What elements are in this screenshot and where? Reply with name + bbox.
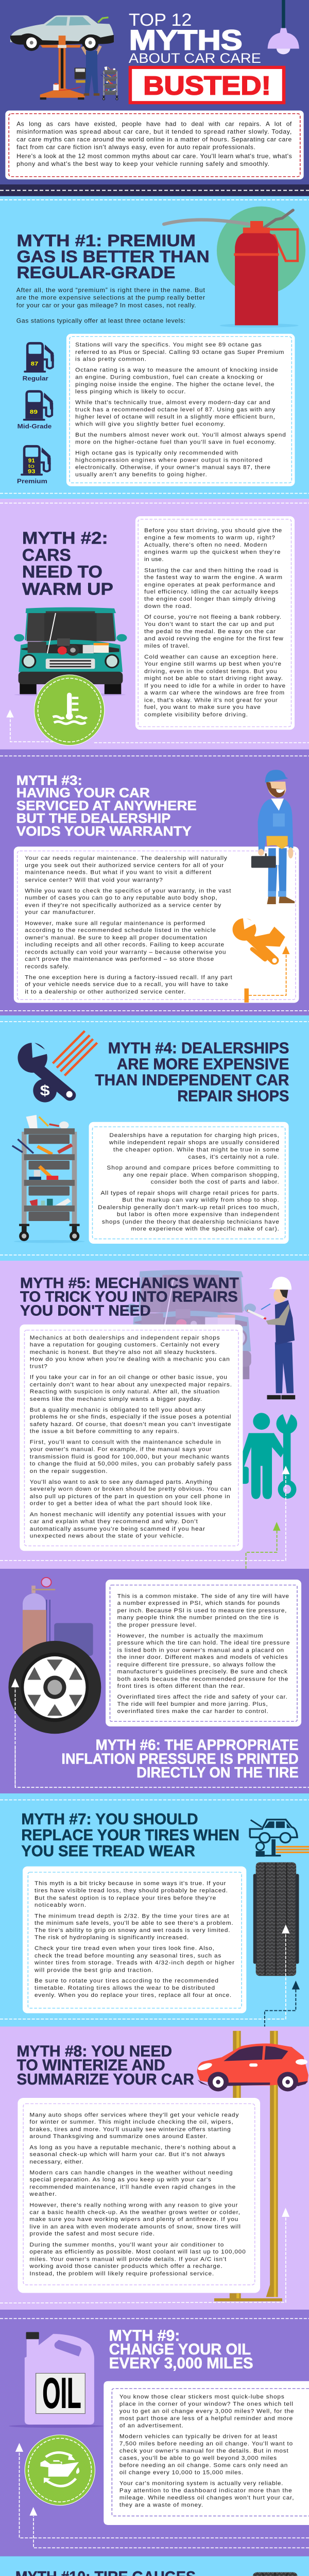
card: tread wear: evenly. When you do replace your tires, replace all four at once. <box>35 1992 231 1998</box>
card: oil change interval: You know those clear stickers most quick-lube shops <box>119 2394 284 2400</box>
card: seasonal check-ups: Instead, the problem will likely require professional service. <box>29 2271 214 2277</box>
card: seasonal check-ups: seasonal check-up which will harm your car. But it's not always <box>29 2151 225 2158</box>
heading: myth 3: MYTH #3: <box>16 773 82 788</box>
heading: myth 8: MYTH #8: YOU NEED <box>17 2042 172 2060</box>
card: tread wear <box>23 1867 246 2013</box>
card: oil change interval: oil change every 10,000 to 15,000 miles. <box>119 2470 243 2476</box>
card: tread wear: timetable. Rotating tires allows the wear to be distributed <box>35 1985 215 1991</box>
myth 3 text continued: it to a dealership or other authorized service center. <box>25 989 185 995</box>
myth 3 text continued <box>25 877 233 995</box>
card: octane explanation: highcompression engines where power output is monitored <box>75 457 262 463</box>
arrow: white dashed <box>0 1466 289 1561</box>
title: TOP 12 <box>129 11 192 30</box>
heading: myth 2: WARM UP <box>22 580 113 599</box>
icon: premium pump: 91 <box>28 458 35 464</box>
myth 2 text continued: down the road. <box>144 603 192 609</box>
card: seasonal check-ups: around Thanksgiving and summarize ones around Easter. <box>29 2133 208 2140</box>
card: octane explanation: an engine. During combustion, fuel can create a knocking or <box>75 375 263 380</box>
myth 2 text continued: You don't want to start the car up and put <box>144 621 274 628</box>
card: trustworthy mechanics <box>20 1325 243 1551</box>
myth 5 text continued: to change the fluid at 50,000 miles, you can probably safely pass <box>30 1461 232 1467</box>
myth 3 text continued: even if they're not specifically authorized as a service center by <box>25 903 221 908</box>
heading: myth 4 <box>95 1039 289 1105</box>
icon: car on lift <box>250 1820 309 1857</box>
card: trustworthy mechanics: If you take your car in for an oil change or other basic issue, you <box>30 1375 227 1381</box>
card: dealership prices: while independent repair shops are usually considered <box>109 1140 279 1146</box>
card: trustworthy mechanics: certainly don't want to hear about any unexpected major repairs. <box>30 1382 232 1388</box>
illustration: tool cart <box>100 66 118 100</box>
panel: myth 7 <box>0 1793 309 2027</box>
card: oil change interval: you to get an oil change every 3,000 miles? Well, for the <box>119 2409 294 2415</box>
card: warranty: maintenance needs. But what if you want to visit a different <box>25 870 212 876</box>
card: warm up: engines warm up the quickest when they're <box>144 549 281 555</box>
card: octane explanation: more on the higher-octane fuel than you'll save in fuel economy. <box>75 439 276 446</box>
myth 2 text continued <box>144 582 285 718</box>
card: warm up <box>135 516 295 730</box>
heading: myth 9: EVERY 3,000 MILES <box>109 2354 253 2372</box>
panel: myth 4 <box>0 1015 309 1261</box>
intro text: misinformation was spread about car care, but it tended to spread rather slowly. Today, <box>16 128 291 135</box>
road divider <box>0 184 309 196</box>
card: tire pressure: pressure which the tire can hold. The ideal tire pressure <box>117 1640 289 1646</box>
panel: myth 6 <box>0 1569 309 1793</box>
myth 2 text continued: fuel efficiency. Idling the car actually keeps <box>144 589 279 595</box>
panel: myth 10 <box>0 2556 309 2576</box>
card: trustworthy mechanics: the issue a bit before committing to any repairs. <box>30 1429 179 1435</box>
card: tire pressure: is listed both in your owner's manual and a placard on <box>117 1648 284 1653</box>
card: seasonal check-ups: recommended maintenance, it'll handle even rapid changes in the <box>29 2184 235 2190</box>
icon: premium pump <box>17 445 51 485</box>
panel: myth 1 <box>0 196 309 499</box>
card: seasonal check-ups: special preparation. As long as you keep up with your car's <box>29 2177 211 2183</box>
card: octane explanation: usually aren't any benefits to going higher. <box>75 472 207 478</box>
panel: header <box>0 0 309 196</box>
card: tire pressure: manufacturer's guidelines precisely. Be sure and check <box>117 1669 287 1675</box>
heading: myth 7: MYTH #7: YOU SHOULD <box>21 1810 198 1828</box>
heading: myth 8: TO WINTERIZE AND <box>17 2056 165 2074</box>
illustration: faded truck behind heading <box>126 1270 256 1379</box>
card: oil change interval: they are a waste of money. <box>119 2502 203 2509</box>
heading: myth 6 <box>61 1737 299 1781</box>
heading: myth 2: MYTH #2: <box>22 529 108 548</box>
card: octane explanation <box>66 334 295 486</box>
heading: myth 3: SERVICED AT ANYWHERE <box>16 798 197 813</box>
card: seasonal check-ups: for winter or summer. This might include checking the oil, wipers, <box>29 2119 233 2125</box>
icon: dark wrench with dollar: $ <box>40 1082 50 1099</box>
card: dealership prices: consider both the cost of parts and labor. <box>151 1179 279 1185</box>
icon: oil change badge <box>25 2435 95 2505</box>
icon: regular pump: Regular <box>23 375 48 382</box>
card: tread wear: noticeably worn. <box>35 1902 86 1908</box>
heading: myth 4: THAN INDEPENDENT CAR <box>95 1071 289 1089</box>
heading: myth 4: ARE MORE EXPENSIVE <box>117 1055 289 1073</box>
card: tire pressure: both axels because the recommended pressure for the <box>117 1676 288 1682</box>
intro text: phony and what's the best way to keep your vehicle running safely and smoothly. <box>16 160 269 167</box>
card: oil change interval: before needing an oil change. Some cars only need an <box>119 2463 287 2469</box>
icon: premium pump: 93 <box>28 469 35 475</box>
myth 3 text continued: including receipts and all other records. Failing to keep accurate <box>25 942 224 948</box>
heading: myth 4: MYTH #4: DEALERSHIPS <box>108 1039 289 1057</box>
heading: myth 2: NEED TO <box>22 563 102 582</box>
myth 5 text continued: on the repair suggestion. <box>30 1468 108 1475</box>
myth 2 text continued: fuel, you want to make sure you have <box>144 704 261 710</box>
card: octane explanation: electronically. Otherwise, if your owner's manual says 87, there <box>75 465 270 471</box>
myth 2 text continued: driving, even in the coldest temps. But you <box>144 669 277 674</box>
card: seasonal check-ups: necessary, either. <box>29 2159 83 2165</box>
badge: busted <box>130 67 284 103</box>
panel: myth 3 <box>0 750 309 1015</box>
card: warranty: urge you seek out their authorized service centers for all of your <box>25 862 224 869</box>
heading: myth 7: REPLACE YOUR TIRES WHEN <box>21 1826 239 1844</box>
heading: myth 1 <box>17 231 210 282</box>
panel: myth 2 <box>0 499 309 750</box>
myth 3 text continued: The one exception here is during a factory-issued recall. If any part <box>25 975 233 980</box>
myth 2 text continued: miles of travel. <box>144 643 190 649</box>
myth 3 text continued: of your vehicle needs service due to a recall, you will have to take <box>25 981 228 988</box>
heading: myth 9 <box>109 2327 253 2372</box>
card: tread wear: The minimum tread depth is 2/32. By the time your tires are at <box>35 1913 229 1919</box>
card: warm up: Actually, there's often no need. Modern <box>144 542 267 548</box>
card: oil change interval: most part those are less of a helpful reminder and more <box>119 2416 293 2421</box>
card: octane explanation: High octane gas is typically only recommended with <box>75 450 238 456</box>
card: warm up: in use. <box>144 556 164 563</box>
card: oil change interval: Your car's monitoring system is actually very reliable. <box>119 2481 283 2486</box>
myth 3 text continued: service center? Will that void your warranty? <box>25 877 163 883</box>
illustration: teal truck with open hood <box>14 607 127 696</box>
intro text: As long as cars have existed, people have had to deal with car repairs. A lot of <box>16 121 292 128</box>
title <box>129 11 261 66</box>
card: dealership prices: Shop around and compare prices before committing to <box>107 1165 279 1171</box>
illustration: red car on lift <box>197 2031 308 2301</box>
card: trustworthy mechanics: mechanic is honest. But they're also not all sleazy hucksters. <box>30 1349 217 1355</box>
card: octane explanation: pinging noise inside the engine. The higher the octane level, the <box>75 382 274 388</box>
card: seasonal check-ups: working avoid those canister products which offer a recharge. <box>29 2263 222 2269</box>
illustration: tire tread <box>253 1862 299 1976</box>
intro text: fact from car care fiction isn't always easy, even for auto repair professionals. <box>16 144 255 150</box>
icon: mid-grade pump: Mid-Grade <box>18 423 52 430</box>
heading: myth 2 <box>22 529 113 599</box>
title: ABOUT CAR CARE <box>129 50 261 66</box>
card: oil change interval: 7,500 miles before needing an oil change. You'll want to <box>119 2441 293 2447</box>
card: oil change interval: mileage. While needless oil changes won't hurt your car, <box>119 2495 294 2501</box>
card: oil change interval: Pay attention to the dashboard indicator more than the <box>119 2488 292 2494</box>
myth 5 text continued: transmission fluid is good for 100,000, but your mechanic wants <box>30 1454 229 1460</box>
card: octane explanation: Octane rating is a way to measure the amount of knocking inside <box>75 367 278 374</box>
card: trustworthy mechanics: But a quality mechanic is obligated to tell you about any <box>30 1407 205 1413</box>
icon: oil can <box>164 207 305 328</box>
heading: myth 9: MYTH #9: <box>109 2327 180 2344</box>
card: octane explanation: Stations will vary the specifics. You might see 89 octane gas <box>75 342 262 348</box>
heading: myth 4: REPAIR SHOPS <box>177 1087 289 1105</box>
card: seasonal check-ups <box>18 2098 260 2293</box>
illustration: gas tank, tire stack and large wheel <box>8 1578 101 1734</box>
card: oil change interval: check your owner's manual for the details. But in most <box>119 2448 289 2454</box>
card: tire pressure <box>106 1580 301 1726</box>
heading: myth 3: VOIDS YOUR WARRANTY <box>16 823 192 839</box>
card: tread wear: winter tires from storage. Treads with 4/32-inch depth or higher <box>34 1960 234 1966</box>
myth 3 text continued: number of cases you can go to any reputable auto body shop, <box>25 895 217 901</box>
card: tread wear: tires have visible tread loss, they should probably be replaced. <box>35 1888 228 1894</box>
arrow: dashed up <box>6 709 53 742</box>
heading: myth 8: SUMMARIZE YOUR CAR <box>17 2071 194 2088</box>
myth 3 text continued: according to the recommended schedule listed in the vehicle <box>25 927 216 934</box>
card: seasonal check-ups: operate as efficiently as possible. Most coolant will last up to 100,000 <box>29 2249 246 2255</box>
myth 3 text continued: However, make sure all regular maintenance is performed <box>25 921 205 926</box>
card: seasonal check-ups: provide the safest and most secure ride. <box>29 2231 154 2237</box>
myth 5 text continued: order to get a better idea of what the part should look like. <box>30 1501 212 1507</box>
card: octane explanation: higher level of octane will result in a slightly more efficient burn, <box>75 414 275 420</box>
heading: myth 1: GAS IS BETTER THAN <box>17 247 210 266</box>
myth 3 text continued: While you want to check the specifics of your warranty, in the vast <box>25 888 231 894</box>
myth 2 text continued: complete visibility before driving. <box>144 712 248 718</box>
card: tire pressure: front tires is often different than the rear. <box>117 1683 245 1689</box>
card: trustworthy mechanics: Reacting with suspicion is only natural. After all, the situation <box>30 1389 219 1395</box>
card: tire pressure: a number expressed in PSI, which stands for pounds <box>117 1600 280 1606</box>
arrow: white dashed <box>0 1924 289 2019</box>
icon: coolant temperature badge <box>35 675 105 745</box>
panel: myth 8 <box>0 2027 309 2310</box>
card: octane explanation: less pinging which is likely to occur. <box>75 389 185 395</box>
card: warranty <box>14 846 299 1003</box>
card: seasonal check-ups: brakes, tires and more. You'll usually see winterize offers starting <box>29 2127 231 2132</box>
icon: mid-grade pump <box>18 390 53 430</box>
heading: myth 2: CARS <box>22 546 71 565</box>
intro text: Here's a look at the 12 most common myths about car care. You'll learn what's true, what's <box>16 152 292 160</box>
card: trustworthy mechanics: First, you'll want to consult with the maintenance schedule in <box>30 1439 221 1446</box>
illustration: oil jug <box>9 2332 104 2428</box>
heading: myth 5: MYTH #5: MECHANICS WANT <box>20 1275 239 1292</box>
card: octane explanation: truck has a recommended octane level of 87. Using gas with any <box>75 407 275 413</box>
myth 5 text continued: severely worn down or broken should be pretty obvious. You can <box>30 1486 231 1493</box>
arrow: white dashed <box>11 1679 19 1787</box>
myth 1 lead text: are the more expensive selections at the pump really better <box>16 294 205 301</box>
card: seasonal check-ups: During the summer months, you'll want your air conditioner to <box>29 2242 224 2248</box>
card: trustworthy mechanics: seems like the mechanic simply wants a bigger payday. <box>30 1396 202 1402</box>
heading: myth 3 <box>16 773 197 839</box>
card: trustworthy mechanics: have a reputation for gouging customers. Certainly not every <box>30 1342 219 1348</box>
card: seasonal check-ups: live in an area with even moderate amounts of snow, snow tires will <box>29 2224 241 2230</box>
title: MYTHS <box>129 24 243 56</box>
card: tread wear: But the safest option is to replace your tires before they're <box>35 1895 216 1901</box>
arrow: white dashed lower <box>29 2507 309 2548</box>
icon: regular pump: 87 <box>31 361 38 367</box>
card: tire pressure: the inner door. Different makes and models of vehicles <box>117 1654 288 1660</box>
card: trustworthy mechanics: safety hazard. Of course, that doesn't mean you can't investigate <box>30 1421 231 1428</box>
card: tire pressure: Overinflated tires affect the ride and safety of your car. <box>117 1694 287 1700</box>
icon: orange wrench in hand <box>233 917 285 963</box>
card: octane explanation: While that's technically true, almost every modern-day car and <box>75 400 270 405</box>
card: seasonal check-ups: However, there's really nothing wrong with any reason to give your <box>29 2202 238 2208</box>
heading: myth 7 <box>21 1810 239 1860</box>
myth 2 text continued: Cold weather can cause an exception here. <box>144 654 278 660</box>
card: tire pressure: However, the number is actually the maximum <box>117 1633 263 1639</box>
panel: myth 5 <box>0 1261 309 1569</box>
card: octane explanation: referred to as Plus or Special. Calling 93 octane gas Super Premium <box>75 349 284 355</box>
heading: myth 1: REGULAR-GRADE <box>17 263 176 282</box>
card: warranty: Your car needs regular maintenance. The dealership will naturally <box>25 855 227 861</box>
icon: premium pump: Premium <box>17 478 47 485</box>
card: warm up: Before you start driving, you should give the <box>144 528 282 534</box>
heading: myth 5: YOU DON'T NEED <box>20 1302 151 1319</box>
card: warm up: the fastest way to warm the engine. A warm <box>144 574 282 581</box>
card: dealership prices: shops (under the theory that dealership technicians have <box>102 1219 279 1225</box>
myth 2 text continued: the engine cool longer than simply driving <box>144 596 276 602</box>
card: seasonal check-ups: miles. Your owner's manual will provide details. If your A/C isn't <box>29 2257 227 2262</box>
card: oil change interval <box>104 2381 309 2525</box>
card: dealership prices: but labor is often more expensive than independent <box>117 1212 280 1218</box>
card: trustworthy mechanics: How do you know when you're dealing with a mechanic you can <box>30 1357 230 1363</box>
illustration: large tool cart <box>12 1115 85 1243</box>
badge: busted: BUSTED! <box>143 72 271 100</box>
myth 1 lead text <box>16 286 205 324</box>
myth 1 lead text: Gas stations typically offer at least three octane levels: <box>16 317 185 324</box>
icon: mid-grade pump: 89 <box>30 409 38 415</box>
card: seasonal check-ups: Many auto shops offer services where they'll get your vehicle ready <box>29 2112 239 2118</box>
myth 1 lead text: After all, the word “premium” is right there in the name. But <box>16 286 205 294</box>
arrow: white dashed upper <box>15 2443 309 2538</box>
myth 2 text continued: If you need to idle for a while in order to have <box>144 683 285 689</box>
illustration: tire tread <box>250 2572 301 2576</box>
myth 2 text continued: might not be able to start driving right away. <box>144 675 283 682</box>
card: trustworthy mechanics: trust? <box>30 1364 47 1369</box>
card: dealership prices <box>89 1122 289 1244</box>
card: dealership prices: All types of repair shops will charge retail prices for parts. <box>101 1190 279 1196</box>
card: dealership prices: any one repair place. When comparison shopping, <box>123 1172 279 1178</box>
card: tire pressure: The ride will feel bumpier and more jarring. Plus, <box>117 1701 268 1707</box>
card: oil change interval: place in the corner of your window? The ones which tell <box>119 2401 293 2407</box>
illustration: oil jug: OIL <box>42 2369 81 2417</box>
heading: myth 9: CHANGE YOUR OIL <box>109 2341 251 2358</box>
intro card <box>5 110 304 179</box>
card: tread wear: This myth is a bit tricky because in some ways it's true. If your <box>35 1880 226 1887</box>
card: tire pressure: per inch. Because PSI is used to measure tire pressure, <box>117 1607 286 1614</box>
icon: teal person with wrench <box>234 1413 297 1499</box>
card: oil change interval: of an advertisement. <box>119 2423 183 2429</box>
card: seasonal check-ups: weather. <box>29 2191 57 2197</box>
card: tread wear: The tire's ability to grip on snowy and wet roads is very limited. <box>35 1927 230 1934</box>
illustration: inspector with clipboard <box>247 1277 295 1399</box>
heading: myth 8 <box>17 2042 194 2088</box>
myth 5 text continued: car and explain what they recommend and why. Don't <box>30 1519 198 1525</box>
card: seasonal check-ups: Modern cars can handle changes in the weather without needing <box>29 2170 233 2176</box>
card: dealership prices: But the markup can vary wildly from shop to shop. <box>122 1197 279 1204</box>
card: tread wear: the minimum safe levels, you'll be able to see there's a problem. <box>35 1920 233 1926</box>
card: dealership prices: Dealership generally don't mark-up retail prices too much, <box>98 1205 279 1211</box>
myth 3 text continued: records safely. <box>25 964 70 970</box>
card: tread wear: Be sure to rotate your tires according to the recommended <box>35 1978 218 1984</box>
card: dealership prices: the cheaper option. While that might be true in some <box>113 1147 279 1153</box>
intro text <box>16 121 292 167</box>
icon: dark wrench with dollar <box>18 1031 97 1103</box>
card: tire pressure: the proper pressure level. <box>117 1622 197 1628</box>
icon: regular pump <box>23 342 54 382</box>
myth 2 text continued: and avoid revving the engine for the first few <box>144 636 284 642</box>
myth 2 text continued: engine operates at peak performance and <box>144 582 275 588</box>
arrow: navy dashed <box>265 1980 300 2027</box>
myth 2 text continued: Your engine still warms up best when you're <box>144 661 281 667</box>
heading: myth 7: YOU SEE TREAD WEAR <box>21 1842 195 1860</box>
card: tread wear: Check your tire tread even when your tires look fine. Also, <box>35 1945 214 1952</box>
arrow: green dashed <box>246 1522 281 1569</box>
card: dealership prices: Dealerships have a reputation for charging high prices, <box>109 1132 279 1139</box>
myth 1 lead text: for your car or your gas mileage? In most cases, not really. <box>16 302 196 309</box>
card: seasonal check-ups: car a basic health check-up. As the weather grows wetter or colder, <box>29 2210 240 2215</box>
heading: myth 5: TO TRICK YOU INTO REPAIRS <box>20 1289 238 1305</box>
arrow: white dashed <box>0 2208 289 2303</box>
card: tire pressure: require different tire pressure, so always follow the <box>117 1662 276 1668</box>
card: oil change interval: cases, you'll be able to go well beyond 3,000 miles <box>119 2455 277 2461</box>
myth 2 text continued: ice, that's okay. While it's not great for your <box>144 698 278 703</box>
card: dealership prices: more experience with the specific make of car). <box>131 1226 279 1232</box>
myth 5 text continued: also pull up pictures of the part in question on your cell phone in <box>30 1494 230 1500</box>
myth 3 text continued: records actually can void your warranty – because otherwise you <box>25 950 226 955</box>
card: warm up: engine a few moments to warm up, right? <box>144 535 275 541</box>
card: warm up: Starting the car and then hitting the road is <box>144 568 279 573</box>
illustration: silver car on lift with mechanic <box>10 15 114 99</box>
card: trustworthy mechanics: Mechanics at both dealerships and independent repair shops <box>30 1335 220 1341</box>
myth 3 text continued: your car manufacturer. <box>25 909 95 916</box>
heading: myth 3: BUT THE DEALERSHIP <box>16 811 170 826</box>
card: tread wear: The risk of hydroplaning is significantly increased. <box>35 1935 188 1941</box>
card: seasonal check-ups: As long as you have a reputable mechanic, there's nothing about a <box>29 2145 236 2150</box>
mechanic's legs and shoes <box>267 891 295 904</box>
myth 5 text continued: unexpected news about the state of your vehicle. <box>30 1533 184 1539</box>
myth 3 text continued: owner's manual. Be sure to keep all proper documentation <box>25 935 207 941</box>
card: tire pressure: This is a common mistake. The side of any tire will have <box>117 1594 289 1599</box>
card: dealership prices: cases, it's certainly not a rule. <box>188 1154 279 1160</box>
arrow: orange dashed <box>244 946 289 1003</box>
heading: myth 5 <box>20 1275 239 1319</box>
card: octane explanation: is also pretty common. <box>75 357 146 363</box>
myth 5 text continued: automatically assume you're being scammed if you hear <box>30 1526 205 1532</box>
panel: myth 9 <box>0 2310 309 2556</box>
card: trustworthy mechanics: your owner's manual. For example, if the manual says your <box>30 1447 212 1452</box>
card: tire pressure: overinflated tires make the car harder to control. <box>117 1708 268 1715</box>
intro text: car care myths can race around the world online in a matter of hours. Separating car care <box>16 136 292 143</box>
myth 3 text continued: can't prove the maintenance was performed – so store those <box>25 956 214 962</box>
myth 2 text continued: the pedal to the medal. Be easy on the car <box>144 629 276 635</box>
card: oil change interval: Modern vehicles can typically be driven for at least <box>119 2434 278 2440</box>
myth 2 text continued: a warm car where the windows are free from <box>144 690 284 696</box>
myth 5 text continued <box>30 1454 232 1539</box>
icon: premium pump: to <box>28 464 35 469</box>
illustration: smiling mechanic <box>251 770 293 897</box>
heading: myth 1: MYTH #1: PREMIUM <box>17 231 196 250</box>
heading: myth 3: HAVING YOUR CAR <box>16 785 150 801</box>
card: octane explanation: But the numbers almost never work out. You'll almost always spend <box>75 432 286 438</box>
card: tread wear: check the tread before mounting any seasonal tires, such as <box>35 1953 221 1959</box>
card: tread wear: will provide the best grip and traction. <box>34 1968 153 1973</box>
card: tire pressure: many people think the number printed on the tire is <box>117 1615 279 1621</box>
card: octane explanation: which will give you slightly better fuel economy. <box>75 421 225 427</box>
icon: hanging lamp <box>268 0 299 54</box>
myth 5 text continued: An honest mechanic will identify any potential issues with your <box>30 1512 226 1518</box>
myth 2 text continued: Of course, you're not fleeing a bank robbery. <box>144 614 281 620</box>
card: seasonal check-ups: make sure you have working wipers and plenty of antifreeze. If you <box>29 2216 238 2223</box>
myth 5 text continued: You'll also want to ask to see any damaged parts. Anything <box>30 1479 212 1485</box>
card: trustworthy mechanics: problems he or she finds, especially if the issue poses a potential <box>30 1414 231 1420</box>
